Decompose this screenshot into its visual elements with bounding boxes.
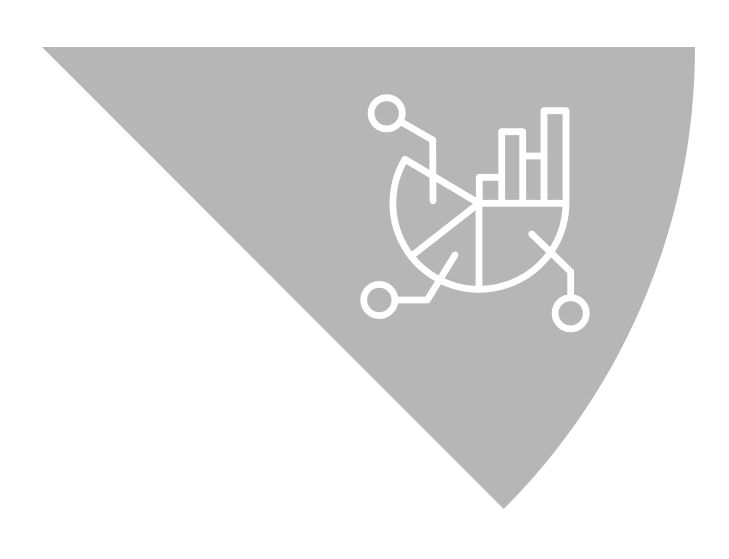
panel: grey sector shape (42, 47, 695, 509)
icon: pie chart (393, 159, 566, 289)
icon: bottom-left connector node (364, 255, 455, 316)
icon: pie chart and bar chart with connectors (364, 98, 586, 329)
icon: bar chart (479, 111, 566, 203)
icon: bottom-right connector node (532, 234, 586, 329)
icon: top-left connector node (371, 98, 433, 201)
